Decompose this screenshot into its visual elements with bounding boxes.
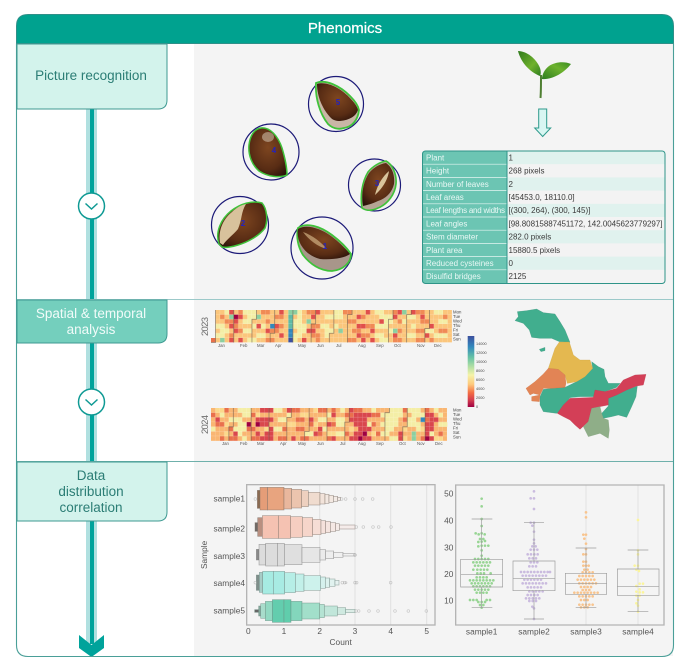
axis labels: sample5 — [214, 606, 245, 616]
flow line with arrow — [79, 109, 104, 657]
calendar heatmap 2024: Thu — [453, 421, 461, 426]
boxen plot — [199, 485, 435, 647]
axis labels: 30 — [444, 542, 454, 552]
axis labels — [199, 494, 429, 647]
calendar heatmap 2024: Sun — [453, 434, 461, 440]
colorbar legend: 2000 — [476, 396, 484, 400]
axis labels — [444, 489, 654, 636]
calendar heatmap 2024: Wed — [453, 416, 462, 422]
table: plant metrics: 15880.5 pixels — [508, 246, 560, 255]
calendar heatmap 2023: Apr — [275, 343, 282, 348]
axis labels: sample1 — [466, 626, 498, 636]
box outlines — [461, 519, 659, 619]
calendar heatmap 2024: May — [298, 441, 307, 446]
boxes: sample3 — [256, 543, 356, 566]
swarm: sample4 — [635, 520, 643, 612]
table: plant metrics: [(300, 264), (300, 145)] — [508, 206, 590, 215]
colorbar legend: 14000 — [476, 342, 487, 346]
calendar heatmap 2023: Dec — [434, 343, 442, 348]
swarm: sample2 — [521, 491, 550, 619]
swarm: sample3 — [574, 512, 598, 607]
calendar heatmap 2023: Wed — [453, 318, 462, 324]
table: plant metrics: Plant — [426, 153, 445, 162]
table: plant metrics: 2125 — [508, 272, 527, 281]
axis labels: sample4 — [214, 578, 245, 588]
colorbar legend: 0 — [476, 405, 478, 409]
boxes: sample1 — [254, 487, 374, 510]
table: plant metrics: Disulfid bridges — [426, 272, 481, 281]
axis labels: Sample — [199, 540, 209, 569]
boxes: sample5 — [255, 600, 428, 622]
table: plant metrics — [422, 151, 665, 284]
axis labels: 1 — [282, 626, 287, 636]
colorbar legend: 6000 — [476, 378, 484, 382]
calendar heatmap 2023: Jun — [317, 343, 325, 348]
seed 1 — [291, 217, 353, 279]
seed 4: 4 — [272, 146, 277, 155]
calendar heatmap 2024: Feb — [240, 441, 248, 446]
label: Spatial & temporal analysis: Spatial & temporal — [36, 306, 146, 321]
calendar heatmap 2023: Fri — [453, 328, 458, 332]
seed 1: 1 — [323, 242, 328, 251]
table: plant metrics: Stem diameter — [426, 233, 478, 242]
calendar heatmap 2024: Aug — [358, 441, 366, 446]
calendar heatmap 2023: Jan — [218, 343, 226, 348]
table: plant metrics: Leaf areas — [426, 193, 464, 202]
table: plant metrics: 268 pixels — [508, 167, 545, 176]
calendar heatmap 2023: Feb — [240, 343, 248, 348]
icon: chevron circle 2 — [78, 389, 104, 415]
boxes: sample4 — [254, 571, 392, 594]
label: Spatial & temporal analysis — [17, 300, 167, 343]
table: plant metrics: 282.0 pixels — [508, 233, 551, 242]
axis labels: 0 — [246, 626, 251, 636]
icon: chevron circle 1 — [78, 193, 104, 219]
table: plant metrics: 0 — [508, 259, 514, 268]
axis labels: 2 — [317, 626, 322, 636]
calendar heatmap 2023: Nov — [417, 343, 425, 348]
choropleth map — [515, 309, 646, 438]
calendar heatmap 2023: May — [298, 343, 307, 348]
title header bar: Phenomics — [308, 20, 382, 37]
table: plant metrics: Height — [426, 167, 450, 176]
arrow down — [535, 109, 551, 136]
calendar heatmap 2023: Tue — [453, 314, 461, 319]
axis labels: sample2 — [214, 524, 245, 534]
plot frame and gridlines — [456, 485, 664, 625]
swarm: sample1 — [470, 499, 493, 608]
calendar heatmap 2023: Sat — [453, 332, 460, 337]
label: Data distribution correlation: distribution — [58, 484, 124, 499]
calendar heatmap 2023: Aug — [358, 343, 366, 348]
axis labels: 50 — [444, 489, 454, 499]
table: plant metrics: 1 — [508, 153, 514, 162]
table: plant metrics: Reduced cysteines — [426, 259, 494, 268]
label: Picture recognition — [17, 44, 167, 109]
icon: seedling — [518, 51, 571, 98]
axis labels: 20 — [444, 569, 454, 579]
seed 3: 3 — [375, 179, 380, 188]
calendar heatmap 2024: Mon — [453, 408, 462, 412]
calendar heatmap 2024: Jun — [317, 441, 325, 446]
calendar heatmap 2023: Thu — [453, 323, 461, 328]
calendar heatmap 2024: Jan — [222, 441, 230, 446]
axis labels: sample3 — [214, 551, 245, 561]
label: Spatial & temporal analysis: analysis — [67, 322, 116, 337]
calendar heatmap 2024: Sep — [376, 441, 384, 446]
axis labels: 10 — [444, 596, 454, 606]
calendar heatmap 2024: Mar — [257, 441, 265, 446]
calendar heatmap 2024: Dec — [435, 441, 443, 446]
table: plant metrics: Plant area — [426, 246, 463, 255]
calendar heatmap 2023: 2023 — [200, 317, 211, 336]
seed 2: 2 — [241, 219, 246, 228]
colorbar legend: 4000 — [476, 387, 484, 391]
axis labels: 5 — [424, 626, 429, 636]
axis labels: 4 — [388, 626, 393, 636]
colorbar legend: 8000 — [476, 369, 484, 373]
calendar heatmap 2024: Sat — [453, 430, 460, 435]
label: Picture recognition: Picture recognition — [35, 68, 147, 83]
axis labels: sample3 — [570, 626, 602, 636]
calendar heatmap 2023: Sep — [376, 343, 384, 348]
axis labels: Count — [330, 637, 352, 647]
calendar heatmap 2023: Mon — [453, 310, 462, 314]
colorbar legend — [468, 336, 487, 409]
table: plant metrics: Leaf lengths and widths — [426, 206, 505, 215]
axis labels: sample1 — [214, 494, 245, 504]
boxes: sample2 — [255, 516, 392, 538]
table: plant metrics: [98.80815887451172, 142.0045623779297] — [508, 219, 662, 228]
seed 2 — [212, 196, 268, 254]
label: Data distribution correlation: Data — [77, 468, 106, 483]
panel: gray content backgrounds — [194, 44, 673, 656]
calendar heatmap 2024 — [200, 408, 462, 446]
calendar heatmap 2023: Mar — [257, 343, 265, 348]
table: plant metrics: Leaf angles — [426, 219, 467, 228]
calendar heatmap 2024: Jul — [340, 441, 346, 446]
calendar heatmap 2024: Nov — [417, 441, 425, 446]
colorbar legend: 10000 — [476, 360, 487, 364]
title header bar — [16, 14, 674, 44]
calendar heatmap 2023: Jul — [336, 343, 342, 348]
table: plant metrics: Number of leaves — [426, 180, 489, 189]
axis labels: sample4 — [622, 626, 654, 636]
colorbar legend: 12000 — [476, 351, 487, 355]
plot frame and gridlines — [247, 485, 435, 625]
calendar heatmap 2024: Apr — [280, 441, 287, 446]
calendar heatmap 2024: Tue — [453, 412, 461, 417]
calendar heatmap 2023 — [200, 310, 462, 348]
table: plant metrics: 2 — [508, 180, 514, 189]
table: plant metrics: [45453.0, 18110.0] — [508, 193, 575, 202]
axis labels: 40 — [444, 516, 454, 526]
axis labels: sample2 — [518, 626, 550, 636]
axis labels: 3 — [353, 626, 358, 636]
calendar heatmap 2023: Sun — [453, 336, 461, 342]
calendar heatmap 2024: 2024 — [200, 415, 211, 434]
calendar heatmap 2024: Fri — [453, 426, 458, 430]
seed 3 — [348, 159, 400, 211]
label: Data distribution correlation — [17, 462, 167, 521]
label: Data distribution correlation: correlation — [59, 500, 123, 515]
calendar heatmap 2023: Oct — [394, 343, 401, 348]
seed 5: 5 — [336, 98, 341, 107]
calendar heatmap 2024: Oct — [399, 441, 406, 446]
beeswarm box plot — [444, 485, 664, 636]
seed 5 — [308, 76, 364, 132]
seed 4 — [243, 124, 299, 180]
